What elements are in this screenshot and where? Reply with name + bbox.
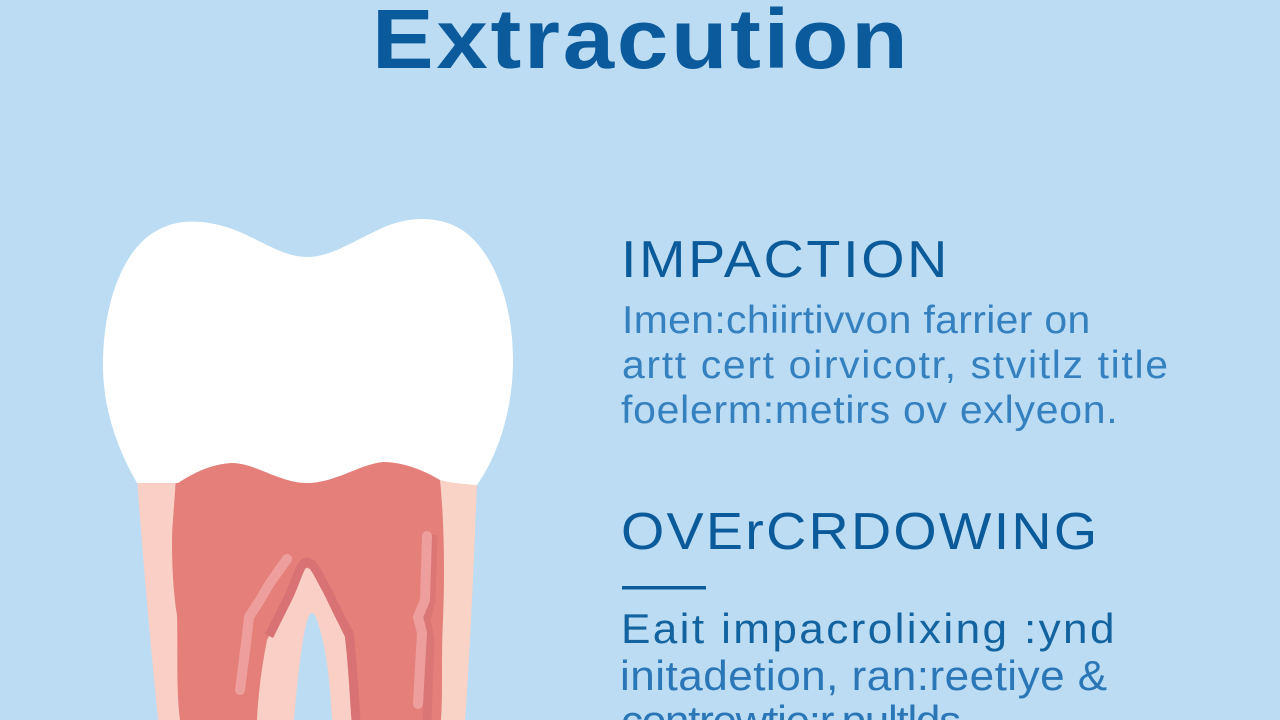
- pulp inner shading: [269, 562, 356, 720]
- illustration: tooth cross-section: [103, 219, 513, 720]
- root shade right: [440, 478, 477, 720]
- section: overcrowding: [620, 503, 1114, 720]
- body text: impaction: foelerm:metirs ov exlyeon.: [621, 389, 1118, 432]
- body text: impaction: Imen:chiirtivvon farrier on: [622, 299, 1090, 342]
- body text: impaction: artt cert oirvicotr, stvitlz title: [622, 344, 1168, 387]
- section: impaction: [621, 231, 1168, 432]
- body text: overcrowding: Eait impacrolixing :ynd: [621, 606, 1114, 653]
- pulp highlight left: [240, 559, 287, 690]
- pulp highlight right: [418, 536, 427, 704]
- heading: overcrowding: OVErCRDOWING: [621, 503, 1097, 561]
- body text: overcrowding: [620, 606, 1114, 720]
- pulp right shading: [426, 535, 433, 720]
- body text: impaction: [621, 299, 1168, 432]
- heading rule: [622, 586, 706, 590]
- tooth roots: [137, 478, 477, 720]
- heading: impaction: IMPACTION: [621, 231, 947, 289]
- tooth pulp: [172, 450, 444, 720]
- tooth crown: [103, 219, 513, 485]
- body text: overcrowding: initadetion, ran:reetiye &: [620, 653, 1107, 700]
